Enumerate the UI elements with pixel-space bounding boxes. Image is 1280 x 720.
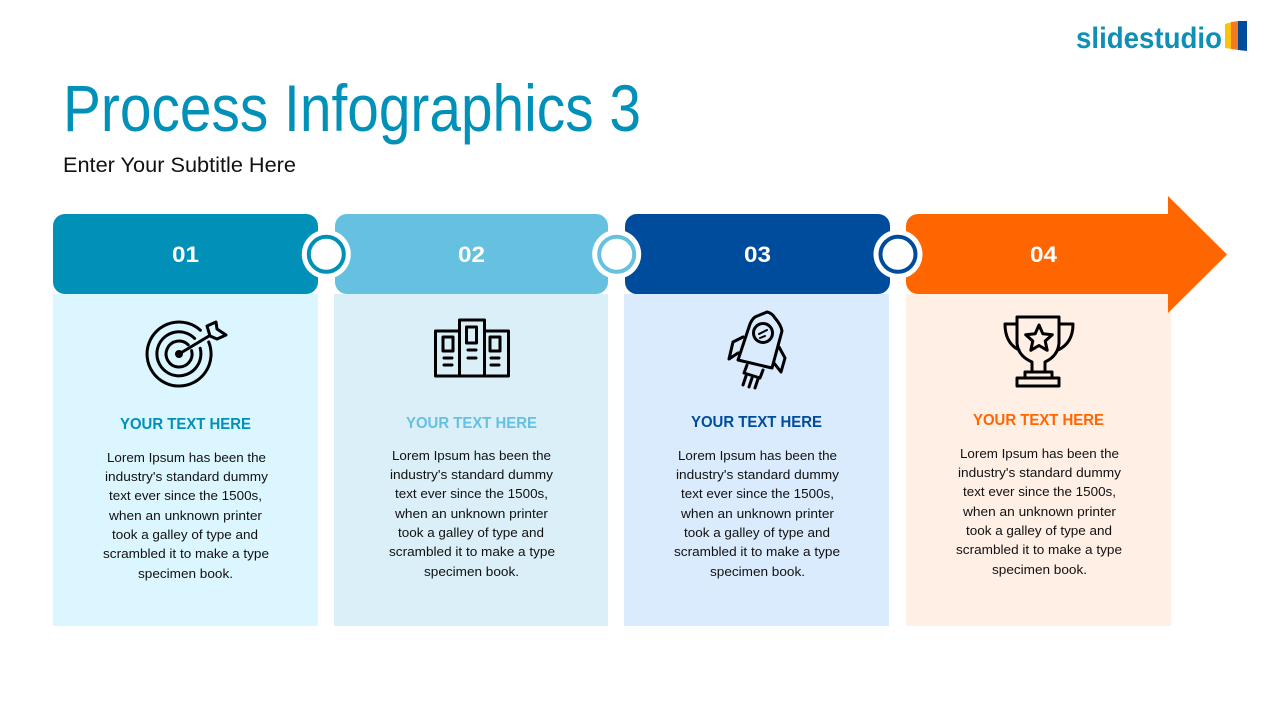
text block: text ever since the 1500s, (681, 486, 834, 501)
text block: took a galley of type and (966, 523, 1112, 538)
text block: industry's standard dummy (390, 467, 554, 482)
heading: your text here: YOUR TEXT HERE (973, 412, 1104, 429)
text block: specimen book. (992, 562, 1087, 577)
text block (674, 448, 840, 579)
text block: text ever since the 1500s, (963, 484, 1116, 499)
text block: specimen book. (710, 564, 805, 579)
text block: specimen book. (138, 566, 233, 581)
text block: when an unknown printer (394, 506, 549, 521)
text block: Lorem Ipsum has been the (107, 450, 266, 465)
panel: step 1 (53, 214, 318, 626)
subtitle: Enter Your Subtitle Here (63, 154, 296, 177)
panel: step 2 (334, 214, 608, 626)
text block: industry's standard dummy (958, 465, 1122, 480)
text block: industry's standard dummy (676, 467, 840, 482)
text block: scrambled it to make a type (674, 544, 840, 559)
text block: Lorem Ipsum has been the (392, 448, 551, 463)
connector: ring 1 (302, 230, 351, 279)
text block: took a galley of type and (112, 527, 258, 542)
header: 01 (53, 214, 318, 294)
text block: when an unknown printer (680, 506, 835, 521)
icon: target with arrow (147, 322, 226, 386)
heading: your text here: YOUR TEXT HERE (691, 414, 822, 431)
header: 02: 02 (458, 242, 485, 267)
text block: scrambled it to make a type (389, 544, 555, 559)
heading: your text here: YOUR TEXT HERE (120, 416, 251, 433)
icon: rocket (729, 312, 785, 388)
text block (389, 448, 555, 579)
text block: industry's standard dummy (105, 469, 269, 484)
connector: ring 2 (592, 230, 641, 279)
text block: when an unknown printer (108, 508, 263, 523)
text block: scrambled it to make a type (103, 546, 269, 561)
title: Process Infographics 3 (63, 71, 641, 145)
header: 03 (625, 214, 890, 294)
text block: Lorem Ipsum has been the (678, 448, 837, 463)
icon: trophy (1005, 317, 1073, 386)
header arrow: 04 (906, 196, 1227, 313)
text block: scrambled it to make a type (956, 542, 1122, 557)
header arrow: 04: 04 (1030, 242, 1058, 267)
panel: step 4 (906, 196, 1227, 626)
icon: books (436, 320, 508, 376)
heading: your text here: YOUR TEXT HERE (406, 415, 537, 432)
connector: ring 3 (874, 230, 922, 279)
text block: Lorem Ipsum has been the (960, 446, 1119, 461)
text block (956, 446, 1122, 577)
text block: took a galley of type and (684, 525, 830, 540)
text block: text ever since the 1500s, (395, 486, 548, 501)
panel: step 3 (624, 214, 890, 626)
logo: slidestudio: slidestudio (1076, 22, 1222, 55)
text block: text ever since the 1500s, (109, 488, 262, 503)
header: 02 (335, 214, 608, 294)
text block (103, 450, 269, 581)
text block: specimen book. (424, 564, 519, 579)
text block: when an unknown printer (962, 504, 1117, 519)
text block: took a galley of type and (398, 525, 544, 540)
header: 01: 01 (172, 242, 199, 267)
header: 03: 03 (744, 242, 771, 267)
